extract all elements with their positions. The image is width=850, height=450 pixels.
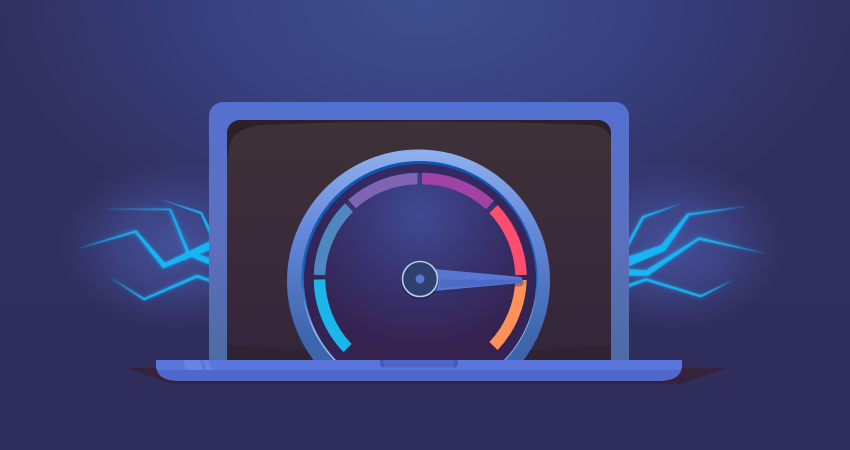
- segment: violet: [352, 178, 418, 204]
- base notch: [380, 360, 458, 368]
- base highlight stripes: [183, 360, 212, 370]
- gauge needle: [434, 269, 524, 292]
- segment: cyan: [320, 280, 348, 348]
- gauge hub: [401, 262, 439, 300]
- segment: orange: [494, 280, 521, 346]
- segment: steel blue: [320, 208, 349, 275]
- speed test laptop illustration: [38, 0, 812, 384]
- speedometer gauge: [287, 150, 550, 360]
- glow: left lightning: [60, 160, 290, 330]
- gauge inner ring: [302, 161, 538, 360]
- icon: left lightning bolts: [75, 198, 212, 301]
- icon: right lightning bolts: [626, 203, 768, 298]
- gauge face: [304, 164, 536, 360]
- segment: red: [494, 209, 521, 275]
- gauge outer ring: [287, 150, 550, 360]
- segment: magenta: [422, 178, 490, 205]
- laptop screen: [227, 120, 611, 360]
- laptop shadow: [127, 368, 727, 384]
- laptop base: [156, 360, 682, 381]
- glow: right lightning: [555, 160, 785, 330]
- gauge arc segments: [320, 178, 521, 348]
- laptop lid: [209, 102, 629, 360]
